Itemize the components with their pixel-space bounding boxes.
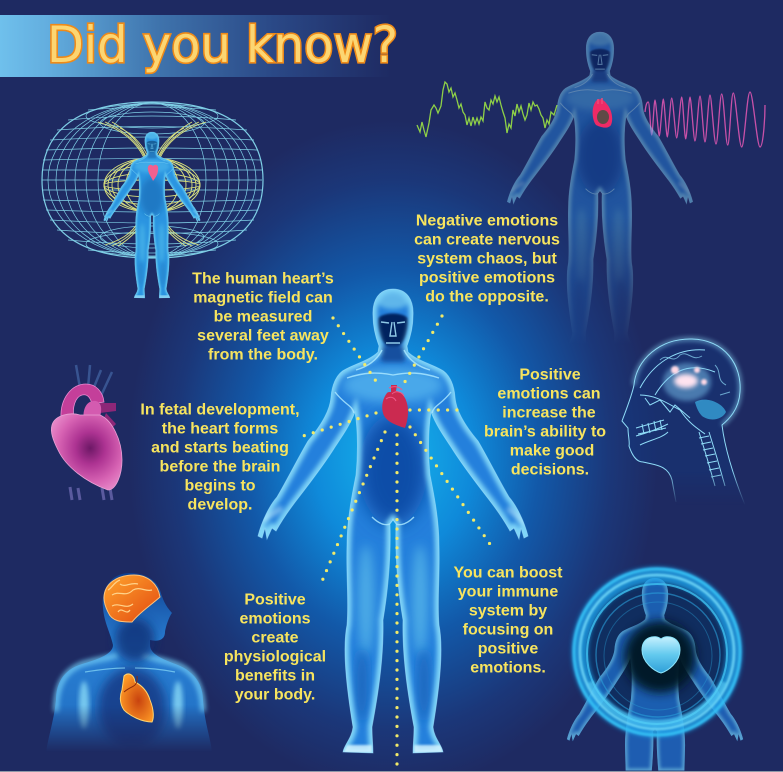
text: decisions: make good: [510, 442, 594, 460]
icon: orange brain: [104, 575, 160, 622]
illustration: magnetic field torus and figure: [42, 102, 263, 298]
text: physiological benefits: [224, 592, 326, 704]
text: nervous system: positive emotions: [419, 270, 555, 286]
illustration: central glowing figure: [258, 289, 528, 753]
text: magnetic field: from the body.: [208, 346, 318, 364]
illustration: upper body with brain and heart: [46, 573, 212, 752]
text: decisions: emotions can: [497, 386, 601, 402]
illustration: energy rings around figure with heart: [567, 569, 743, 771]
figure: translucent body: [507, 32, 693, 351]
text: physiological benefits: Positive: [244, 592, 306, 608]
text: nervous system: can create nervous: [414, 232, 560, 248]
dotted connector lines: [303, 316, 494, 764]
text: physiological benefits: create: [251, 630, 299, 646]
text: nervous system: Negative emotions: [416, 212, 558, 230]
text: physiological benefits: your body.: [235, 686, 315, 704]
text: immune system: system by: [469, 602, 547, 620]
text: magnetic field: several feet away: [197, 328, 329, 344]
text: decisions: [484, 366, 606, 478]
text: physiological benefits: benefits in: [235, 668, 315, 684]
text: fetal development: begins to: [184, 478, 256, 494]
text: fetal development: before the brain: [160, 458, 280, 476]
text: fetal development: [140, 402, 300, 514]
text: immune system: [453, 564, 563, 676]
title: Did you know?: [47, 16, 398, 74]
text: magnetic field: magnetic field can: [193, 290, 333, 306]
illustration: skull and brain profile: [622, 339, 745, 505]
illustration: wave and figure: [417, 32, 765, 351]
text: physiological benefits: physiological: [224, 648, 326, 666]
wave: coherent pink: [645, 92, 765, 147]
text: immune system: focusing on: [463, 622, 553, 638]
icon: central heart: [382, 385, 408, 428]
text: fetal development: develop.: [188, 496, 252, 514]
text: decisions: decisions.: [511, 462, 589, 478]
text: magnetic field: be measured: [214, 308, 312, 326]
text: fetal development: and starts beating: [151, 440, 289, 456]
text: immune system: positive: [478, 640, 538, 658]
text: nervous system: system chaos, but: [417, 250, 557, 268]
text: decisions: Positive: [519, 366, 581, 384]
text: nervous system: [414, 212, 560, 306]
text: immune system: emotions.: [470, 660, 546, 676]
icon: glowing blue heart: [642, 637, 680, 673]
wave: chaotic green: [417, 82, 557, 137]
text: magnetic field: [192, 270, 334, 364]
text: decisions: brain’s ability to: [484, 424, 606, 440]
text: immune system: You can boost: [453, 564, 563, 582]
icon: red heart: [593, 98, 612, 128]
figure: blue silhouette: [567, 578, 743, 771]
title banner: [0, 15, 398, 77]
text: physiological benefits: emotions: [239, 610, 311, 628]
text: fetal development: In fetal development,: [140, 402, 300, 418]
illustration: magenta heart: [51, 365, 122, 500]
text: fetal development: the heart forms: [162, 420, 278, 438]
text: nervous system: do the opposite.: [425, 288, 549, 306]
text: immune system: your immune: [458, 584, 558, 600]
text: decisions: increase the: [502, 404, 596, 422]
text: magnetic field: The human heart’s: [192, 270, 334, 288]
icon: orange heart: [120, 674, 153, 722]
